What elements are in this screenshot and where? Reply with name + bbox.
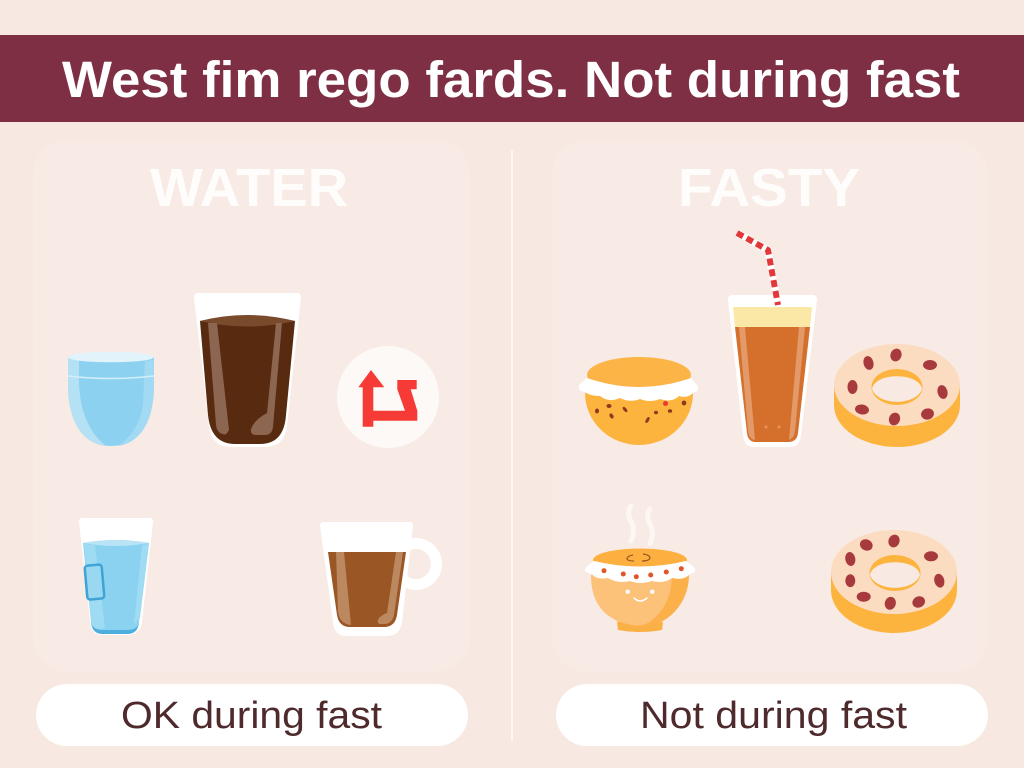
heading: fasty: FASTY [678, 158, 860, 218]
icon: glazed donut bottom [831, 530, 957, 633]
icon: water glass with tag [79, 518, 153, 635]
icon: red arrow badge [337, 346, 439, 448]
title banner: West fim rego fards. Not during fast [62, 51, 960, 108]
panel: fasty [552, 140, 988, 672]
label pill: not during fast [556, 684, 988, 746]
label pill: ok during fast: OK during fast [121, 695, 382, 737]
heading: water: WATER [150, 158, 348, 218]
steam [628, 506, 652, 544]
icon: orange bowl with sprinkles [579, 357, 698, 445]
icon: blue water glass [68, 352, 154, 446]
title banner [0, 35, 1024, 122]
icon: dark coffee glass [194, 293, 301, 447]
icon: coffee mug [320, 522, 436, 636]
panel: water [33, 140, 470, 672]
label pill: ok during fast [36, 684, 468, 746]
icon: iced drink with straw [728, 233, 817, 447]
label pill: not during fast: Not during fast [640, 695, 907, 737]
icon: glazed donut top [834, 344, 960, 447]
icon: smiling steaming bowl [585, 506, 695, 632]
